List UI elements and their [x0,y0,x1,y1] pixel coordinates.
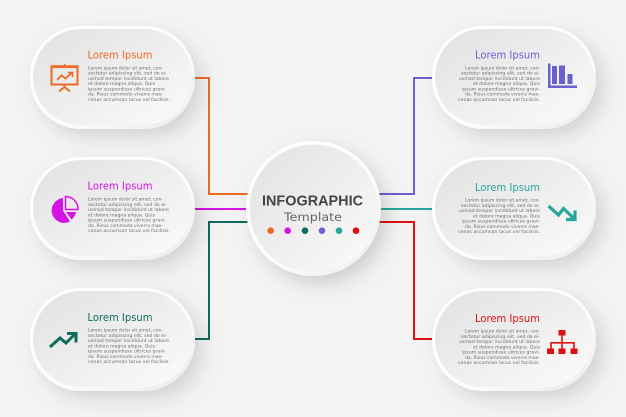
body text: cenas accumsan lacus vel facilisis. [88,359,170,365]
body text: ipsum suspendisse ultrices gravi- [88,86,166,92]
connector: purple [376,78,432,194]
icon: bar chart [548,64,577,88]
body text: cenas accumsan lacus vel facilisis. [458,97,540,103]
body text: sectetur adipiscing elit, sed do ei- [88,333,167,339]
panel: right middle [432,157,596,260]
heading: Lorem Ipsum [88,50,153,62]
body text: usmod tempor incididunt ut labore [459,76,540,82]
body text: et dolore magna aliqua. Quis [88,212,156,218]
panel: left bottom [30,288,195,391]
body text: da. Risus commodo viverra mae- [465,355,540,361]
heading: Lorem Ipsum [475,314,540,325]
icon: trend up arrow [50,334,76,347]
center subtitle: Template [283,210,342,224]
body text: cenas accumsan lacus vel facilisis. [458,360,540,366]
heading: Lorem Ipsum [88,182,153,192]
body text: da. Risus commodo viverra mae- [88,354,163,360]
body text: et dolore magna aliqua. Quis [473,81,541,87]
body text: ipsum suspendisse ultrices gravi- [462,219,540,225]
body text: ipsum suspendisse ultrices gravi- [88,218,166,224]
body text: sectetur adipiscing elit, sed do ei- [461,203,540,209]
body text: sectetur adipiscing elit, sed do ei- [461,334,540,340]
connector: red [376,222,432,339]
body text: Lorem ipsum dolor sit amet, con- [88,328,163,334]
body text: usmod tempor incididunt ut labore [459,208,540,214]
body text: cenas accumsan lacus vel facilisis. [458,229,540,235]
connector: orange [195,78,250,194]
body text: Lorem ipsum dolor sit amet, con- [88,66,163,72]
body text: usmod tempor incididunt ut labore [459,339,540,345]
body text: sectetur adipiscing elit, sed do ei- [88,71,167,77]
panel: center circle [246,141,381,276]
body text: usmod tempor incididunt ut labore [88,207,169,213]
panel: left top [30,26,195,129]
icon: presentation board [50,64,78,92]
heading: Lorem Ipsum [475,183,540,194]
body text: cenas accumsan lacus vel facilisis. [88,228,170,234]
body text: ipsum suspendisse ultrices gravi- [88,349,166,355]
body text: Lorem ipsum dolor sit amet, con- [465,198,540,204]
body text: da. Risus commodo viverra mae- [465,92,540,98]
colour dots [267,227,359,234]
body text: ipsum suspendisse ultrices gravi- [462,86,540,92]
heading: Lorem Ipsum [88,313,153,324]
body text [458,198,541,235]
body text [458,66,541,103]
panel: right bottom [432,288,596,391]
body text [88,197,170,234]
panel: right top [432,26,596,129]
icon: trend down arrow [548,206,575,220]
body text: et dolore magna aliqua. Quis [88,81,156,87]
body text: usmod tempor incididunt ut labore [88,338,169,344]
body text: sectetur adipiscing elit, sed do ei- [461,71,540,77]
body text: et dolore magna aliqua. Quis [473,344,541,350]
body text: sectetur adipiscing elit, sed do ei- [88,202,167,208]
body text: ipsum suspendisse ultrices gravi- [462,350,540,356]
body text: da. Risus commodo viverra mae- [88,223,163,229]
panel: left middle [30,157,195,260]
center heading: INFOGRAPHIC [262,192,363,210]
body text: et dolore magna aliqua. Quis [473,213,541,219]
body text: usmod tempor incididunt ut labore [88,76,169,82]
body text: et dolore magna aliqua. Quis [88,343,156,349]
icon: org chart [547,330,578,354]
connector: green [195,222,250,339]
body text [88,328,170,365]
connector: teal [376,208,432,210]
body text: da. Risus commodo viverra mae- [88,92,163,98]
body text: Lorem ipsum dolor sit amet, con- [465,66,540,72]
icon: pie chart [52,196,78,223]
body text: Lorem ipsum dolor sit amet, con- [88,197,163,203]
body text: Lorem ipsum dolor sit amet, con- [465,329,540,335]
body text: da. Risus commodo viverra mae- [465,224,540,230]
body text: cenas accumsan lacus vel facilisis. [88,97,170,103]
body text [458,329,541,366]
body text [88,66,170,103]
connector: magenta [195,208,250,210]
heading: Lorem Ipsum [475,50,540,62]
